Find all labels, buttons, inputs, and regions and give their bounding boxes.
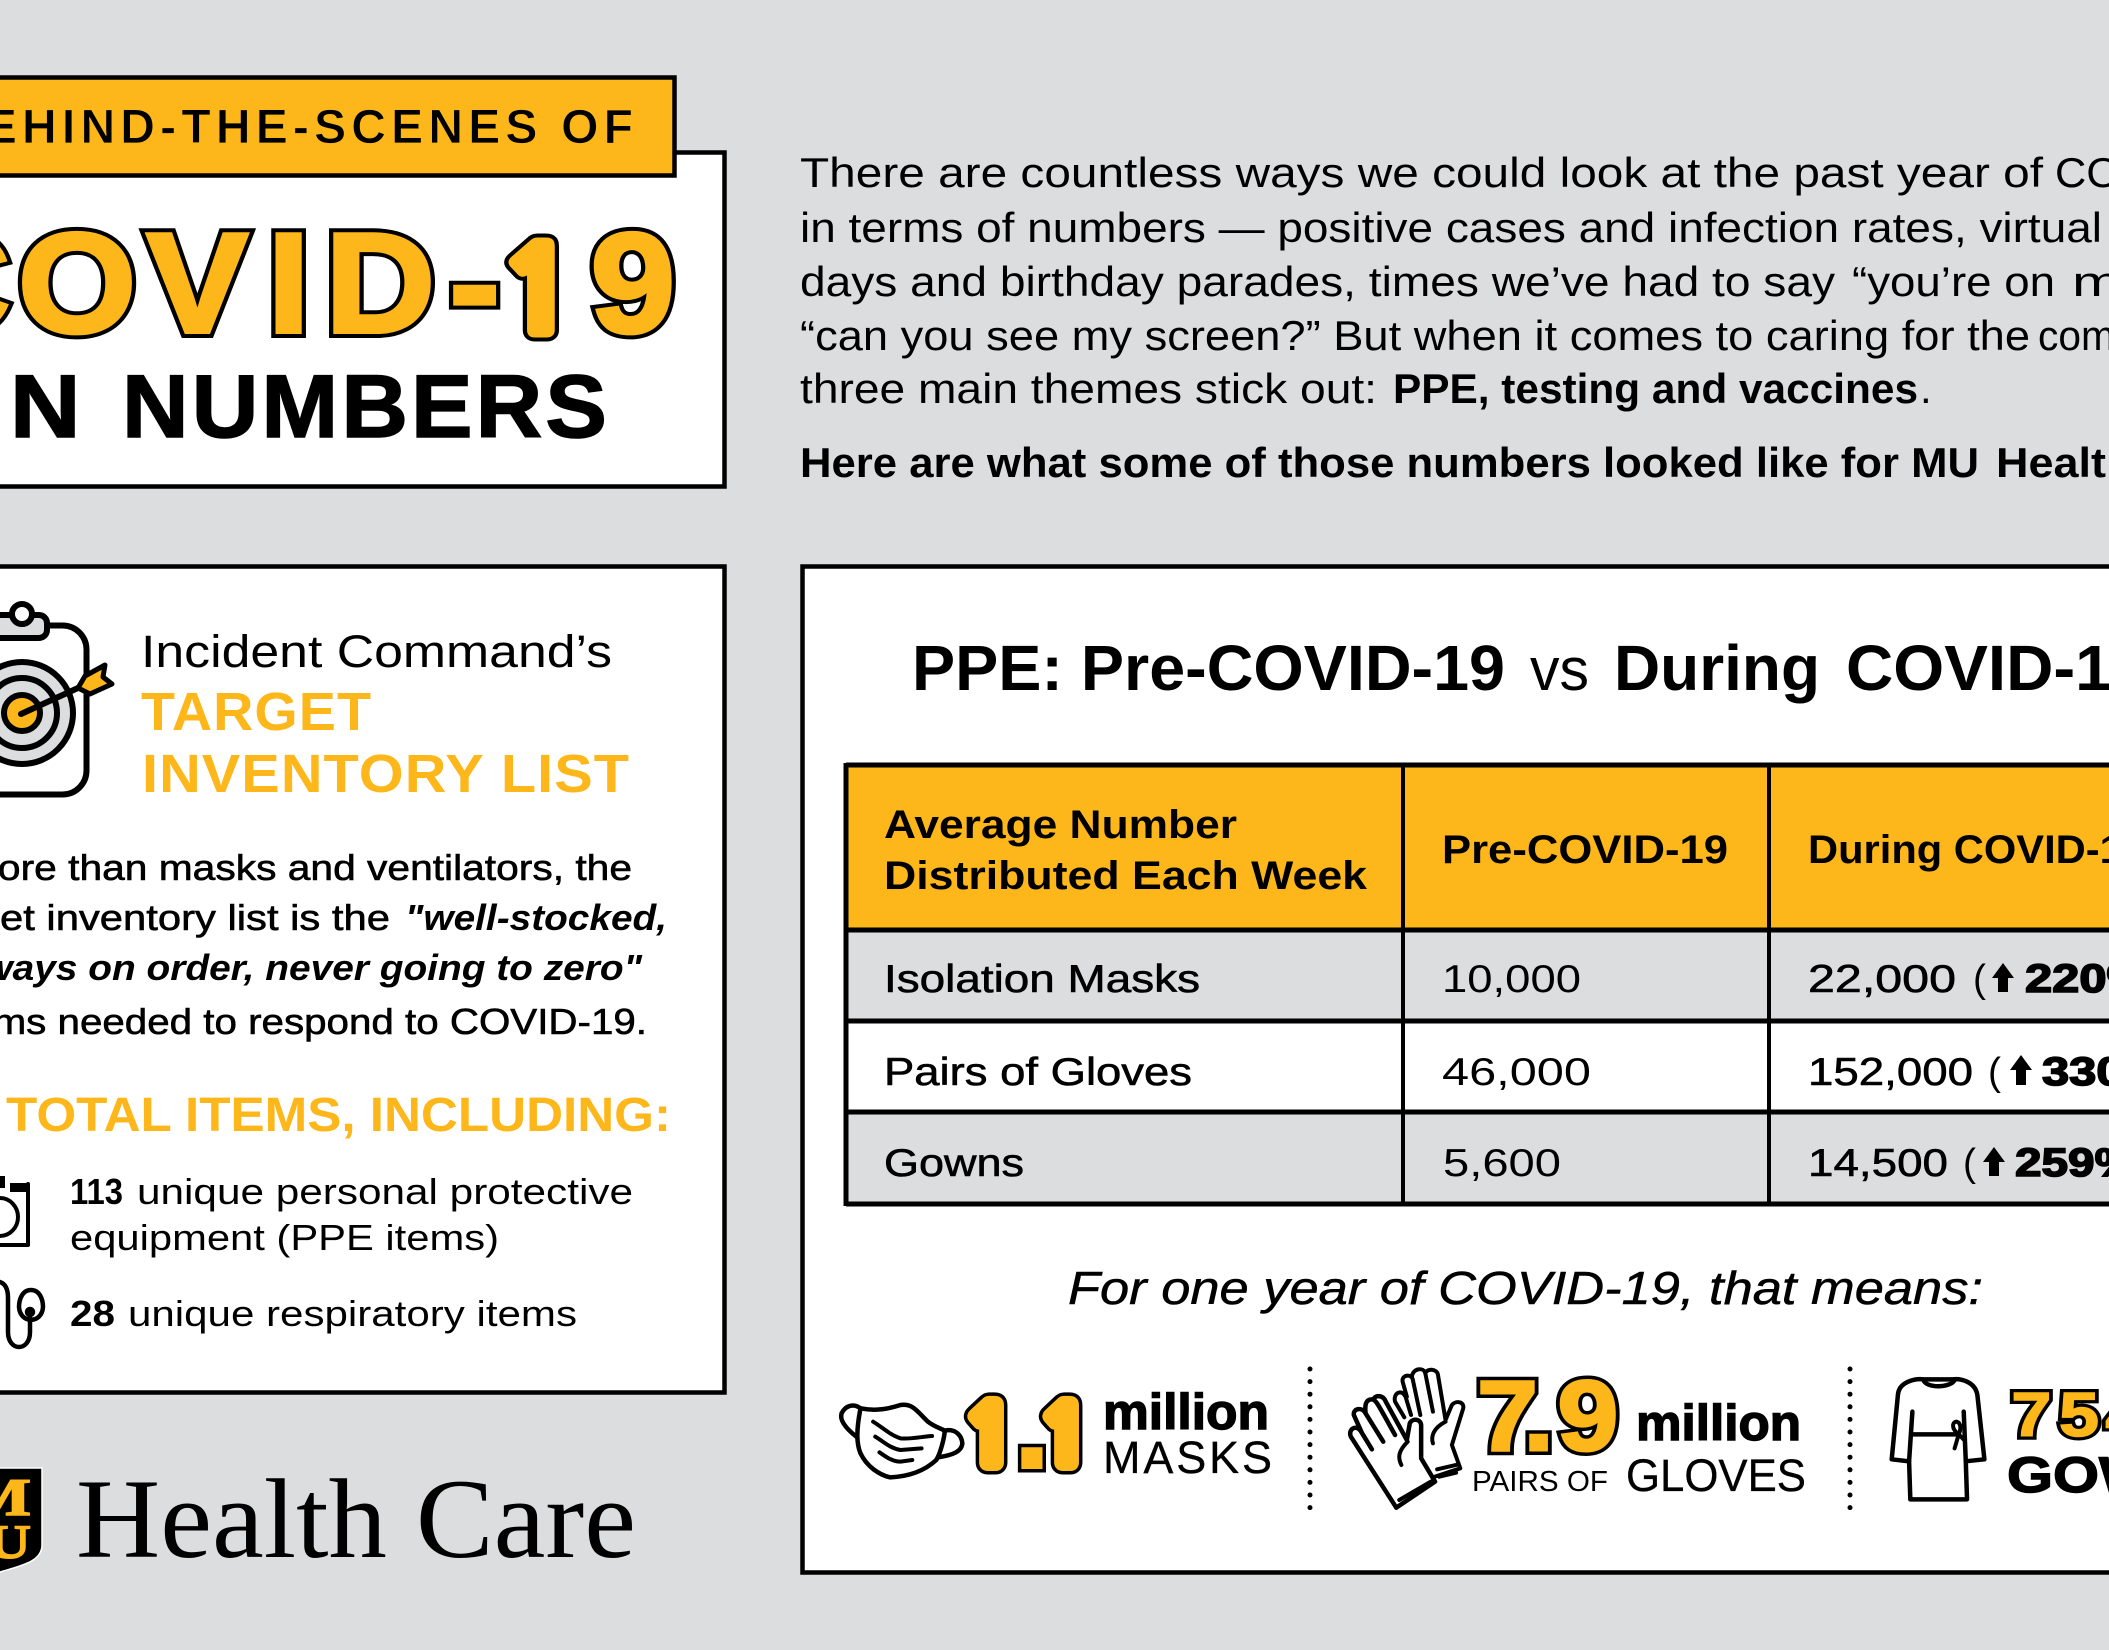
number: 1.1: 1.1 <box>966 1392 1089 1481</box>
row: gowns: ( <box>1963 1142 1976 1185</box>
text: 28 respiratory items: unique respiratory items <box>128 1293 577 1334</box>
row: gowns: Gowns <box>884 1142 1024 1185</box>
stat: masks <box>841 1384 1272 1483</box>
banner: behind-the-scenes <box>0 78 674 176</box>
heading: in numbers: NUMBERS <box>122 356 610 456</box>
text: 113 PPE items <box>70 1171 633 1258</box>
intro text: in terms of numbers — positive cases and infection rates, virtual <box>800 204 2102 251</box>
row: pairs of gloves <box>884 1050 2109 1094</box>
panel: target inventory list <box>0 566 724 1392</box>
stat: gloves <box>1350 1362 1806 1508</box>
text block: description <box>0 847 667 1042</box>
table: weekly distribution <box>846 763 2109 1206</box>
stat: gowns <box>1892 1379 2109 1503</box>
row: gowns: 14,500 <box>1808 1142 1948 1185</box>
row: isolation masks: 22,000 <box>1808 958 1956 1001</box>
stat: masks: MASKS <box>1103 1432 1272 1483</box>
heading: PPE comparison: PPE: Pre-COVID-19 <box>912 632 1505 704</box>
panel: PPE comparison <box>802 566 2109 1572</box>
heading: incident command: Incident Command’s <box>141 626 612 677</box>
icon: face mask <box>841 1405 962 1477</box>
text: 113 PPE items: unique personal protective <box>137 1171 633 1212</box>
heading: incident command <box>141 626 630 804</box>
table header <box>884 803 2109 898</box>
row: gowns: 5,600 <box>1443 1142 1561 1185</box>
text: 113 PPE items: equipment (PPE items) <box>70 1217 499 1258</box>
table header: Pre-COVID-19 <box>1442 828 1728 872</box>
heading: PPE comparison: During <box>1614 632 1820 704</box>
table header: Average Number <box>884 803 1237 847</box>
icon: gloves <box>1350 1369 1463 1508</box>
intro text: days and birthday parades, times we’ve had to say <box>800 258 1835 305</box>
heading: PPE comparison: vs <box>1530 636 1589 703</box>
heading: incident command: INVENTORY LIST <box>142 744 630 804</box>
heading: incident command: TARGET <box>141 682 372 742</box>
icon: clipboard with target <box>0 604 112 794</box>
intro text: “can you see my screen?” But when it comes to caring for the <box>800 312 2030 359</box>
stat: gloves: million <box>1636 1395 1801 1451</box>
icon: gown <box>1892 1379 1984 1499</box>
intro text <box>800 149 2109 486</box>
stat: masks: million <box>1103 1384 1269 1440</box>
row: isolation masks <box>884 957 2109 1001</box>
table header: Distributed Each Week <box>884 854 1368 898</box>
text block: description: "well-stocked, <box>405 897 667 938</box>
stat: gloves: PAIRS OF <box>1472 1466 1608 1498</box>
icon: PPE <box>0 1176 29 1245</box>
number: 7.9: 7.9 <box>1477 1362 1618 1472</box>
panel: title <box>0 78 725 486</box>
heading: total items: TOTAL ITEMS, INCLUDING: <box>6 1089 671 1142</box>
intro text: PPE, testing and vaccines <box>1393 365 1918 412</box>
intro text: “you’re on <box>1852 258 2055 305</box>
intro text: . <box>1920 365 1932 412</box>
icon: shield <box>0 1468 42 1572</box>
heading: PPE comparison <box>912 632 2109 704</box>
row: pairs of gloves: Pairs of Gloves <box>884 1051 1192 1094</box>
row: isolation masks: Isolation Masks <box>884 958 1200 1001</box>
intro text: Here are what some of those numbers looked like for MU <box>800 439 1979 486</box>
row: pairs of gloves: 46,000 <box>1442 1051 1591 1094</box>
subheading: one year: For one year of COVID-19, that means: <box>1068 1262 1983 1314</box>
stat: gloves: GLOVES <box>1626 1450 1806 1501</box>
row: gowns <box>884 1141 2109 1185</box>
number: 1.1: 1.1 <box>966 1392 1089 1481</box>
text: 28 respiratory items: 28 <box>70 1293 115 1334</box>
text: 113 PPE items: 113 <box>70 1171 123 1212</box>
row: pairs of gloves: 152,000 <box>1808 1051 1973 1094</box>
number: 7.9: 7.9 <box>1477 1362 1618 1472</box>
row: isolation masks: ( <box>1973 958 1986 1001</box>
icon: respiratory mask <box>0 1282 43 1347</box>
intro text: three main themes stick out: <box>800 365 1377 412</box>
row: pairs of gloves: ( <box>1988 1051 2001 1094</box>
row: isolation masks: 10,000 <box>1442 958 1581 1001</box>
intro text: There are countless ways we could look at the past year of <box>800 149 2043 196</box>
logo: MU Health Care: Health Care <box>76 1457 636 1582</box>
